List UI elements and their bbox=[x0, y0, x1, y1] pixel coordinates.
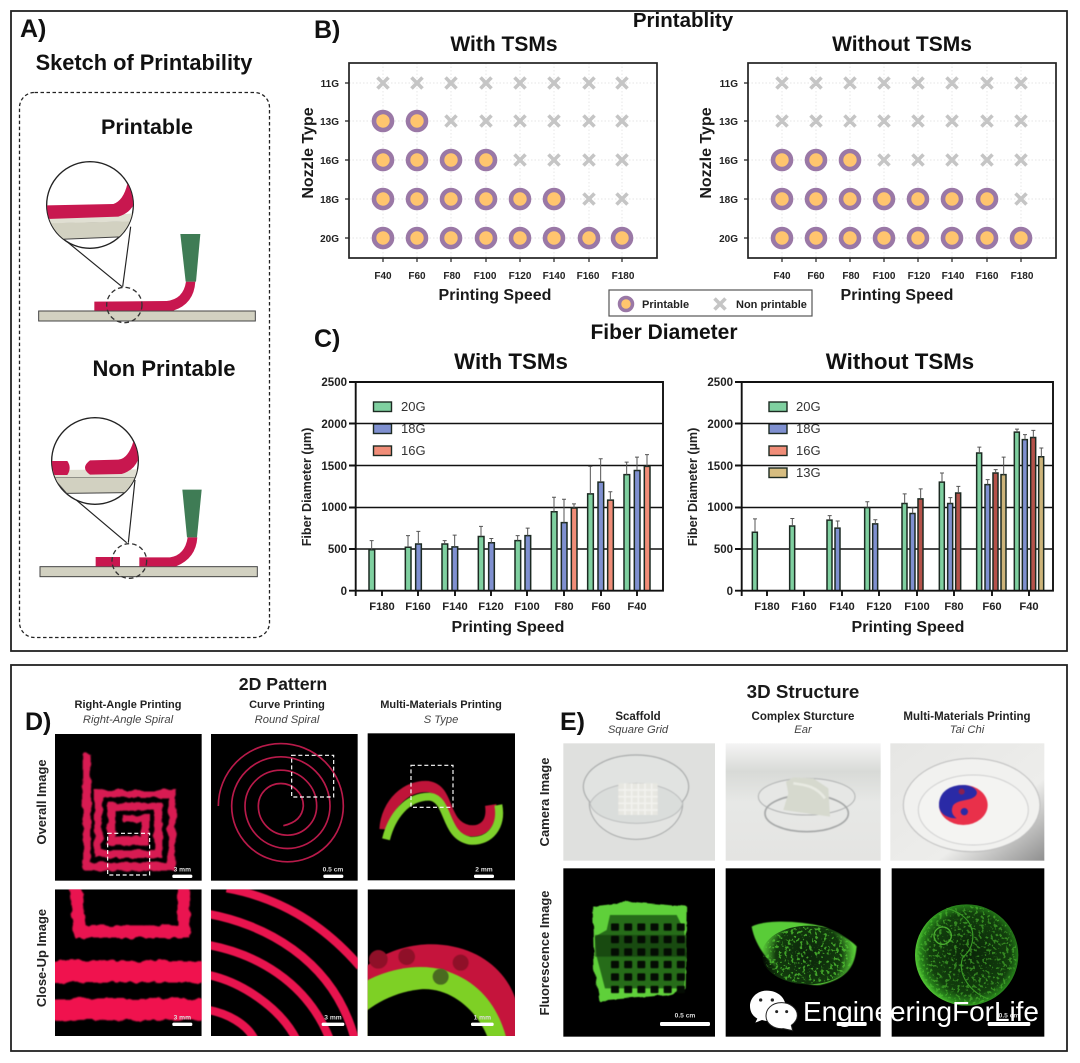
y tick labels: 11G bbox=[720, 79, 738, 90]
image: right-angle spiral close-up: 3 mm bbox=[174, 1015, 191, 1022]
non printable markers bbox=[378, 78, 628, 204]
x tick labels: F60 bbox=[591, 601, 611, 613]
column title: complex structure: Complex Sturcture bbox=[752, 711, 854, 723]
x tick labels: F140 bbox=[829, 601, 855, 613]
y tick labels: 2000 bbox=[321, 419, 347, 431]
fluorescence: square grid: 0.5 cm bbox=[675, 1012, 695, 1019]
y axis title: Nozzle Type bbox=[698, 107, 715, 199]
heading: 3D structure: 3D Structure bbox=[747, 681, 859, 702]
printable markers bbox=[773, 151, 1030, 247]
heading: fiber diameter: Fiber Diameter bbox=[590, 321, 738, 344]
heading: printability: Printablity bbox=[633, 9, 734, 32]
x tick labels: F80 bbox=[443, 271, 461, 282]
legend bbox=[374, 399, 426, 458]
x tick labels: F120 bbox=[908, 271, 931, 282]
image: right-angle spiral overall: 3 mm bbox=[174, 867, 191, 874]
x tick labels: F40 bbox=[374, 271, 392, 282]
photo: tai chi structure in dish bbox=[890, 743, 1044, 861]
fluorescence: tai chi: 0.5 cm bbox=[999, 1012, 1019, 1019]
image: round spiral overall bbox=[211, 734, 358, 881]
watermark: WeChat icon and EngineeringForLife bbox=[750, 991, 1039, 1031]
heading: without TSMs bar chart: Without TSMs bbox=[826, 349, 974, 374]
x tick labels: F140 bbox=[442, 601, 468, 613]
heading: sketch of printability: Sketch of Printability bbox=[36, 50, 252, 75]
column title: curve printing: Curve Printing bbox=[249, 699, 325, 711]
heading: 2D pattern: 2D Pattern bbox=[239, 674, 327, 694]
column title: scaffold: Square Grid bbox=[608, 724, 669, 736]
photo: square grid scaffold in dish bbox=[563, 743, 715, 861]
y tick labels: 1000 bbox=[321, 502, 347, 514]
image: S type close-up bbox=[367, 889, 517, 1037]
image: right-angle spiral close-up bbox=[55, 889, 202, 1036]
panel B label: B) bbox=[314, 16, 340, 44]
legend: printable and non printable: Printable bbox=[642, 299, 689, 311]
scale bar: ear bbox=[837, 1022, 867, 1026]
heading: non printable: Non Printable bbox=[92, 356, 236, 381]
x tick labels: F80 bbox=[944, 601, 964, 613]
x tick labels: F140 bbox=[942, 271, 965, 282]
column title: scaffold: Scaffold bbox=[615, 711, 661, 723]
legend: 13G bbox=[796, 465, 821, 480]
panel E: 3D structure bbox=[537, 681, 1044, 1037]
row label: overall image: Overall Image bbox=[34, 759, 49, 845]
sketch: printable nozzle and filament bbox=[39, 162, 255, 323]
panel A label: A) bbox=[20, 15, 46, 43]
y tick labels bbox=[321, 377, 347, 598]
legend: 16G bbox=[401, 443, 426, 458]
y tick labels: 18G bbox=[320, 195, 339, 206]
dashed sketch panel bbox=[20, 92, 270, 638]
x axis title: Printing Speed bbox=[439, 287, 551, 304]
panel: 2D patterns and 3D structures frame bbox=[11, 665, 1067, 1051]
column title: complex structure: Ear bbox=[794, 724, 813, 736]
x tick labels bbox=[773, 271, 1034, 282]
x tick labels: F60 bbox=[807, 271, 825, 282]
x axis title: Printing Speed bbox=[452, 619, 564, 636]
sketch: non printable nozzle and broken filament bbox=[40, 418, 257, 578]
legend: 20G bbox=[401, 399, 426, 414]
x tick labels: F120 bbox=[866, 601, 892, 613]
row label: fluorescence image: Fluorescence Image bbox=[537, 890, 552, 1016]
x tick labels: F180 bbox=[612, 271, 635, 282]
column title: curve printing: Round Spiral bbox=[255, 714, 320, 726]
heading: printable: Printable bbox=[101, 115, 193, 139]
x tick labels: F120 bbox=[509, 271, 532, 282]
legend: 20G bbox=[796, 399, 821, 414]
legend: 18G bbox=[401, 421, 426, 436]
image: round spiral close-up bbox=[208, 888, 360, 1040]
x tick labels: F140 bbox=[543, 271, 566, 282]
x tick labels: F180 bbox=[1011, 271, 1034, 282]
column title: scaffold bbox=[608, 711, 669, 736]
y tick labels bbox=[707, 377, 733, 598]
icon: WeChat bubbles bbox=[750, 991, 797, 1031]
x tick labels: F180 bbox=[369, 601, 395, 613]
printable markers bbox=[374, 112, 631, 247]
dot plot: printability with TSMs bbox=[300, 63, 657, 304]
fluorescence: ear bbox=[726, 868, 881, 1037]
watermark text: EngineeringForLife bbox=[803, 996, 1039, 1027]
image: right-angle spiral overall bbox=[55, 734, 202, 881]
image: round spiral close-up: 3 mm bbox=[324, 1015, 342, 1022]
x tick labels: F120 bbox=[478, 601, 504, 613]
y tick labels: 1500 bbox=[321, 461, 347, 473]
x tick labels: F100 bbox=[873, 271, 896, 282]
column title: complex structure bbox=[752, 711, 854, 736]
bar chart: fiber diameter without TSMs bbox=[686, 377, 1053, 636]
heading: without TSMs dot plot: Without TSMs bbox=[832, 33, 972, 56]
x tick labels: F60 bbox=[408, 271, 426, 282]
legend bbox=[769, 399, 821, 480]
column title: right-angle printing: Right-Angle Spiral bbox=[83, 714, 174, 726]
x tick labels: F40 bbox=[773, 271, 791, 282]
panel E label: E) bbox=[560, 708, 585, 736]
x tick labels: F160 bbox=[791, 601, 817, 613]
x tick labels: F40 bbox=[627, 601, 647, 613]
row label: close-up image: Close-Up Image bbox=[34, 909, 49, 1007]
panel D label: D) bbox=[25, 708, 51, 736]
y tick labels: 1000 bbox=[707, 502, 733, 514]
y tick labels: 16G bbox=[719, 156, 738, 167]
legend: printable and non printable: Non printable bbox=[736, 299, 807, 311]
y tick labels: 1500 bbox=[707, 461, 733, 473]
fluorescence: square grid bbox=[563, 868, 715, 1037]
dot plot: printability without TSMs bbox=[698, 63, 1056, 304]
x tick labels: F40 bbox=[1019, 601, 1039, 613]
panel A: sketch of printability bbox=[20, 15, 270, 638]
column title: multi-materials printing bbox=[380, 699, 502, 726]
y tick labels: 500 bbox=[714, 544, 733, 556]
x axis title: Printing Speed bbox=[841, 287, 953, 304]
y tick labels: 20G bbox=[320, 234, 339, 245]
x axis title: Printing Speed bbox=[852, 619, 964, 636]
x tick labels bbox=[754, 601, 1039, 613]
panel D: 2D pattern bbox=[25, 674, 517, 1040]
row label: camera image: Camera Image bbox=[537, 758, 552, 846]
y tick labels: 11G bbox=[321, 79, 339, 90]
bars bbox=[752, 429, 1044, 591]
x tick labels bbox=[374, 271, 635, 282]
x tick labels bbox=[369, 601, 647, 613]
legend: printable and non printable bbox=[609, 290, 812, 316]
y tick labels: 20G bbox=[719, 234, 738, 245]
x tick labels: F60 bbox=[982, 601, 1002, 613]
column title: right-angle printing: Right-Angle Printing bbox=[75, 699, 181, 711]
x tick labels: F160 bbox=[976, 271, 999, 282]
column title: multi-materials printing bbox=[903, 711, 1031, 736]
panel C label: C) bbox=[314, 325, 340, 353]
y axis title: Fiber Diameter (µm) bbox=[300, 428, 314, 546]
x tick labels: F80 bbox=[842, 271, 860, 282]
y tick labels: 18G bbox=[719, 195, 738, 206]
heading: with TSMs bar chart: With TSMs bbox=[454, 349, 568, 374]
x tick labels: F80 bbox=[554, 601, 574, 613]
panel: printability and fiber diameter frame bbox=[11, 9, 1067, 651]
y tick labels: 0 bbox=[727, 586, 733, 598]
y tick labels: 0 bbox=[341, 586, 347, 598]
image: S type overall: 2 mm bbox=[475, 867, 493, 874]
bars bbox=[369, 455, 650, 591]
y axis title: Nozzle Type bbox=[300, 107, 317, 199]
y tick labels: 2500 bbox=[707, 377, 733, 389]
column title: multi-materials printing: Tai Chi bbox=[950, 724, 985, 736]
y tick labels: 16G bbox=[320, 156, 339, 167]
legend: 16G bbox=[796, 443, 821, 458]
column title: multi-materials printing: Multi-Materials Printing bbox=[903, 711, 1031, 723]
x tick labels: F100 bbox=[904, 601, 930, 613]
y tick labels: 2500 bbox=[321, 377, 347, 389]
y tick labels: 500 bbox=[328, 544, 347, 556]
photo: ear structure in dish bbox=[726, 743, 881, 861]
y tick labels: 13G bbox=[320, 117, 339, 128]
y tick labels: 13G bbox=[719, 117, 738, 128]
legend: 18G bbox=[796, 421, 821, 436]
x tick labels: F100 bbox=[474, 271, 497, 282]
x tick labels: F160 bbox=[405, 601, 431, 613]
y tick labels bbox=[719, 79, 738, 245]
image: round spiral overall: 0.5 cm bbox=[323, 867, 343, 874]
y tick labels bbox=[320, 79, 339, 245]
image: S type close-up: 1 mm bbox=[474, 1015, 491, 1022]
x tick labels: F160 bbox=[577, 271, 600, 282]
column title: multi-materials printing: Multi-Materials Printing bbox=[380, 699, 502, 711]
x tick labels: F180 bbox=[754, 601, 780, 613]
y axis title: Fiber Diameter (µm) bbox=[686, 428, 700, 546]
axes bbox=[349, 382, 663, 596]
column title: right-angle printing bbox=[75, 699, 181, 726]
non printable markers bbox=[776, 78, 1026, 204]
bar chart: fiber diameter with TSMs bbox=[300, 377, 663, 636]
y tick labels: 2000 bbox=[707, 419, 733, 431]
heading: with TSMs dot plot: With TSMs bbox=[450, 33, 558, 56]
axes bbox=[735, 382, 1053, 596]
image: S type overall bbox=[368, 733, 515, 880]
column title: curve printing bbox=[249, 699, 325, 726]
column title: multi-materials printing: S Type bbox=[424, 714, 458, 726]
fluorescence: tai chi bbox=[892, 868, 1044, 1037]
x tick labels: F100 bbox=[514, 601, 540, 613]
